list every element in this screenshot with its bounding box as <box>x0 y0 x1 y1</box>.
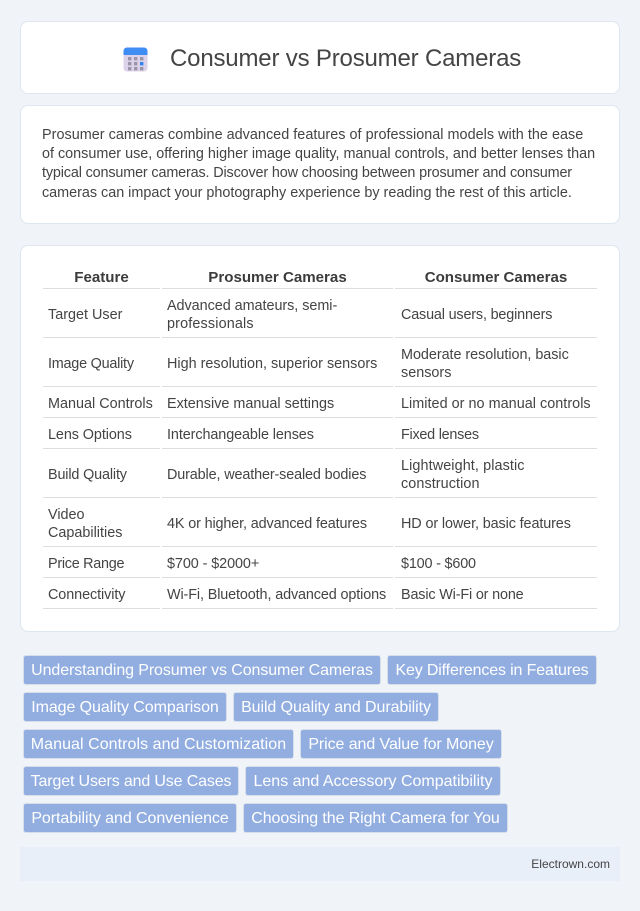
comparison table panel: Wi-Fi, Bluetooth, advanced options <box>167 587 386 603</box>
comparison table panel: Durable, weather-sealed bodies <box>167 467 366 483</box>
column heading: Consumer Cameras: Consumer Cameras <box>425 269 567 286</box>
topic tags <box>23 655 597 833</box>
comparison table panel: Limited or no manual controls <box>401 396 591 412</box>
tag <box>387 655 597 685</box>
row: Build Quality: Build Quality <box>48 467 127 483</box>
comparison table panel: Advanced amateurs, semi- <box>167 298 337 314</box>
tag: Build Quality and Durability <box>241 699 431 716</box>
row: Video Capabilities: Capabilities <box>48 525 122 541</box>
row: Price Range: Price Range <box>48 556 124 572</box>
comparison table panel: construction <box>401 476 480 492</box>
intro paragraph: cameras can impact your photography experience by reading the rest of this article. <box>42 185 572 201</box>
tag: Price and Value for Money <box>308 736 494 753</box>
row: Video Capabilities: Video <box>48 507 85 523</box>
intro text panel <box>20 105 620 224</box>
comparison table panel: $100 - $600 <box>401 556 476 572</box>
comparison table panel: sensors <box>401 365 451 381</box>
intro paragraph: Prosumer cameras combine advanced features of professional models with the ease <box>42 127 583 143</box>
tag <box>23 729 294 759</box>
tag: Choosing the Right Camera for You <box>251 810 500 827</box>
title: Consumer vs Prosumer Cameras <box>170 45 521 72</box>
comparison table panel: Lightweight, plastic <box>401 458 525 474</box>
comparison table panel: Casual users, beginners <box>401 307 552 323</box>
row: Manual Controls: Manual Controls <box>48 396 153 412</box>
row: Video Capabilities <box>48 507 122 541</box>
comparison table panel: 4K or higher, advanced features <box>167 516 367 532</box>
tag: Target Users and Use Cases <box>31 773 231 790</box>
icon: calendar grid <box>124 48 148 72</box>
tag <box>23 803 237 833</box>
footer credit: Electrown.com <box>531 857 610 871</box>
comparison table panel: Moderate resolution, basic <box>401 347 569 363</box>
tag <box>233 692 439 722</box>
tag: Image Quality Comparison <box>31 699 219 716</box>
tag <box>23 766 239 796</box>
header panel <box>20 21 620 94</box>
comparison table panel: $700 - $2000+ <box>167 556 259 572</box>
comparison table panel: Basic Wi-Fi or none <box>401 587 524 603</box>
comparison table panel: Interchangeable lenses <box>167 427 314 443</box>
tag <box>243 803 508 833</box>
row: Lens Options: Lens Options <box>48 427 132 443</box>
row: Connectivity: Connectivity <box>48 587 125 603</box>
column heading: Feature: Feature <box>74 269 129 286</box>
tag <box>245 766 501 796</box>
intro paragraph: of consumer use, offering higher image quality, manual controls, and better lenses than <box>42 146 595 162</box>
comparison table panel: Extensive manual settings <box>167 396 334 412</box>
tag: Understanding Prosumer vs Consumer Cameras <box>31 662 373 679</box>
tag: Portability and Convenience <box>31 810 229 827</box>
tag <box>23 692 227 722</box>
comparison table panel: professionals <box>167 316 254 332</box>
tag: Lens and Accessory Compatibility <box>254 773 492 790</box>
comparison table panel: High resolution, superior sensors <box>167 356 377 372</box>
tag <box>23 655 381 685</box>
comparison table panel: Fixed lenses <box>401 427 479 443</box>
footer bar <box>20 847 620 881</box>
intro paragraph <box>42 127 595 201</box>
comparison table panel: HD or lower, basic features <box>401 516 571 532</box>
tag <box>300 729 502 759</box>
column heading: Prosumer Cameras: Prosumer Cameras <box>208 269 347 286</box>
tag: Manual Controls and Customization <box>31 736 286 753</box>
row: Target User: Target User <box>48 307 122 323</box>
comparison table panel <box>20 245 620 632</box>
intro paragraph: typical consumer cameras. Discover how choosing between prosumer and consumer <box>42 165 572 181</box>
tag: Key Differences in Features <box>395 662 589 679</box>
row: Image Quality: Image Quality <box>48 356 134 372</box>
